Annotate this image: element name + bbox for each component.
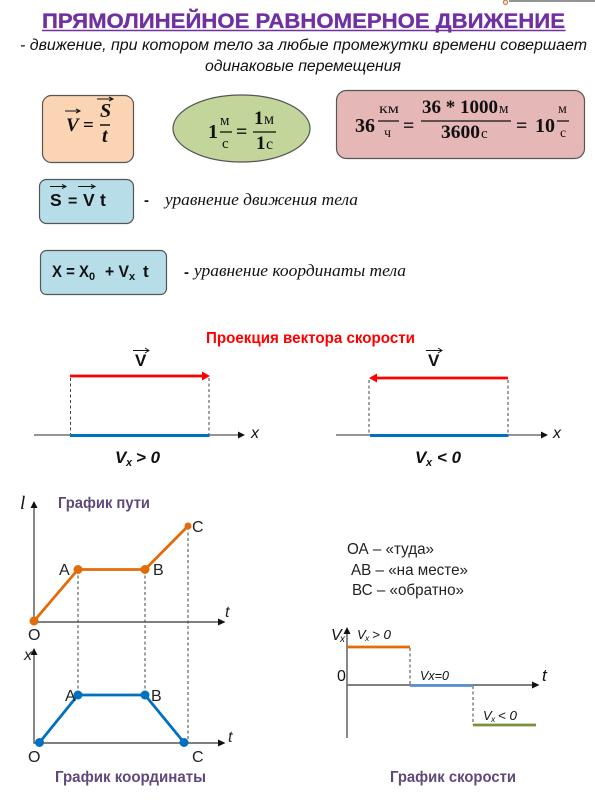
legend: segments: ВС – «обратно» xyxy=(352,582,464,599)
formula box: km/h conversion: с xyxy=(481,126,488,142)
formula box: km/h conversion: ч xyxy=(384,126,391,141)
equation box: coordinate: 0 xyxy=(89,271,95,283)
chart: coordinate graph xyxy=(23,647,233,766)
formula box: km/h conversion: 36 xyxy=(355,115,375,137)
diagram: positive projection: x xyxy=(250,425,260,442)
ellipse: unit definition xyxy=(173,95,310,162)
chart: velocity graph: x xyxy=(490,714,496,724)
chart: velocity graph: > 0 xyxy=(372,627,392,642)
chart: coordinate graph: В xyxy=(151,688,162,705)
chart: path graph: t xyxy=(225,604,230,621)
chart: coordinate graph: А xyxy=(65,688,76,705)
chart: velocity graph: V xyxy=(483,708,493,723)
chart: coordinate graph: С xyxy=(192,749,204,766)
equation box: coordinate: t xyxy=(143,262,149,281)
formula box: velocity: V xyxy=(66,115,80,136)
formula box: km/h conversion: с xyxy=(560,126,566,141)
legend: segments: АВ – «на месте» xyxy=(351,562,468,579)
chart: path graph: С xyxy=(192,519,204,536)
chart: velocity graph: V xyxy=(357,627,367,642)
caption: velocity graph: График скорости xyxy=(390,769,516,786)
heading: velocity projection: Проекция вектора скорости xyxy=(206,330,415,347)
diagram: positive projection: V xyxy=(135,351,147,370)
ellipse: unit definition: 1 xyxy=(256,133,266,154)
chart: coordinate graph: t xyxy=(228,729,233,746)
title: ПРЯМОЛИНЕЙНОЕ РАВНОМЕРНОЕ ДВИЖЕНИЕ xyxy=(42,8,565,33)
chart: path graph: О xyxy=(28,627,40,644)
equation box: coordinate: X = X xyxy=(52,262,90,281)
equation box: displacement: t xyxy=(100,190,106,210)
chart: path graph: l xyxy=(20,493,25,514)
definition text: - движение, при котором тело за любые промежутки времени совершает xyxy=(20,37,587,54)
diagram: negative projection: V xyxy=(428,351,440,370)
definition text: одинаковые перемещения xyxy=(205,58,401,75)
chart: path graph: А xyxy=(59,562,70,579)
label: equation of motion: уравнение движения тела xyxy=(163,190,358,209)
diagram: positive projection: > 0 xyxy=(136,448,161,467)
equation box: displacement: = xyxy=(68,193,77,210)
formula box: velocity: = xyxy=(83,115,94,136)
formula box: velocity: S xyxy=(100,100,111,122)
chart: path graph xyxy=(20,493,230,742)
formula box: km/h conversion: 3600 xyxy=(441,122,480,143)
equation box: displacement xyxy=(40,180,134,224)
label: equation of motion: - xyxy=(144,192,149,209)
formula box: velocity: t xyxy=(102,125,109,147)
formula box: km/h conversion: = xyxy=(403,115,414,137)
equation box: coordinate: x xyxy=(129,271,136,283)
diagram: positive projection: V xyxy=(115,448,128,467)
diagram: negative projection: x xyxy=(552,425,562,442)
chart: path graph: В xyxy=(153,562,164,579)
equation box: displacement: V xyxy=(83,190,95,210)
equation box: coordinate xyxy=(40,250,166,294)
diagram: positive projection: x xyxy=(125,457,133,469)
chart: velocity graph: < 0 xyxy=(498,708,518,723)
caption: coordinate graph: График координаты xyxy=(55,769,206,786)
formula box: km/h conversion xyxy=(336,90,584,158)
chart: velocity graph: V xyxy=(331,627,343,644)
label: coordinate equation: - xyxy=(184,264,189,281)
equation box: coordinate: + V xyxy=(105,262,130,281)
ellipse: unit definition: = xyxy=(236,121,247,143)
formula box: km/h conversion: км xyxy=(379,102,399,117)
chart: velocity graph: Vx=0 xyxy=(420,668,450,683)
diagram: negative projection: x xyxy=(425,457,433,469)
ellipse: unit definition: с xyxy=(222,136,229,152)
legend: segments xyxy=(347,541,468,599)
ellipse: unit definition: м xyxy=(264,111,274,128)
ellipse: unit definition: 1 xyxy=(208,121,218,143)
legend: segments: ОА – «туда» xyxy=(347,541,434,558)
chart: velocity graph: x xyxy=(339,634,346,645)
chart: coordinate graph: О xyxy=(28,749,40,766)
ellipse: unit definition: 1 xyxy=(254,108,264,129)
diagram: negative projection xyxy=(336,348,562,469)
formula box: km/h conversion: = xyxy=(516,115,527,137)
diagram: negative projection: < 0 xyxy=(437,448,462,467)
diagram: positive projection xyxy=(34,348,260,469)
formula box: km/h conversion: м xyxy=(558,102,567,117)
diagram: negative projection: V xyxy=(415,448,428,467)
formula box: km/h conversion: 36 * 1000 xyxy=(422,97,498,118)
definition text xyxy=(20,37,587,75)
chart: velocity graph: x xyxy=(364,633,370,643)
chart: velocity graph: 0 xyxy=(337,668,346,685)
corner fragment xyxy=(504,0,595,4)
equation box: displacement: S xyxy=(50,190,62,210)
chart: velocity graph: t xyxy=(542,666,548,685)
ellipse: unit definition: м xyxy=(220,113,230,129)
label: coordinate equation: уравнение координаты тела xyxy=(192,261,406,280)
formula box: velocity xyxy=(42,96,134,162)
chart: velocity graph xyxy=(331,627,548,738)
ellipse: unit definition: с xyxy=(266,136,273,153)
chart: path graph: График пути xyxy=(58,495,150,512)
formula box: km/h conversion: м xyxy=(499,101,509,117)
chart: coordinate graph: x xyxy=(23,647,33,664)
formula box: km/h conversion: 10 xyxy=(535,115,555,137)
